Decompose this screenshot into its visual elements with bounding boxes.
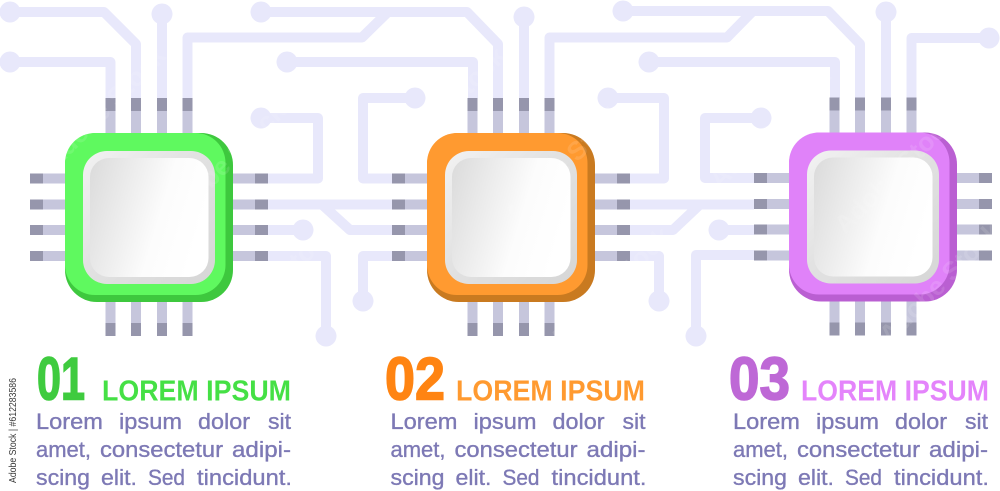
watermark: Adobe Stock [828, 105, 962, 239]
body text 02: Lorem [390, 409, 458, 434]
body text 01: tincidunt. [197, 465, 292, 490]
body text 02: consectetur [454, 437, 578, 462]
body text 03: dolor [895, 409, 947, 434]
heading 03: LOREM IPSUM [801, 376, 989, 408]
body text 01: dolor [198, 409, 250, 434]
body text 03: ipsum [816, 409, 879, 434]
body text 02: elit. [456, 465, 492, 490]
body text 03: consectetur [797, 437, 920, 462]
section 02 [385, 346, 646, 490]
body text 03: tincidunt. [894, 465, 989, 490]
body text 02: Sed [502, 465, 540, 490]
number 02: 02 [385, 346, 445, 412]
watermark: Adobe Stock [158, 95, 292, 229]
section 03 [729, 346, 989, 490]
body text 02: scing [390, 465, 444, 490]
body text 01: amet, [36, 437, 91, 462]
body text 01: consectetur [100, 437, 223, 462]
body text 02: ipsum [474, 409, 536, 434]
body text 02: sit [622, 409, 646, 434]
body text 03: sit [965, 409, 988, 434]
body text 03: elit. [798, 465, 834, 490]
body text 01: ipsum [119, 409, 182, 434]
body text 01 [36, 409, 292, 490]
chip 3: purple [754, 98, 992, 336]
watermark: Adobe Stock [498, 95, 632, 229]
watermark: Adobe Stock [378, 40, 512, 174]
body text 03: Sed [845, 465, 882, 490]
heading 01: LOREM IPSUM [102, 376, 291, 408]
watermark: Adobe Stock [543, 220, 677, 354]
watermark [38, 40, 1000, 354]
body text 02: dolor [552, 409, 604, 434]
body text 03: scing [733, 465, 787, 490]
body text 02: tincidunt. [552, 465, 646, 490]
heading 02: LOREM IPSUM [456, 376, 645, 408]
body text 02 [390, 409, 646, 490]
body text 03: Lorem [733, 409, 800, 434]
body text 03: amet, [733, 437, 788, 462]
chip 2: orange [392, 98, 630, 336]
section 01 [36, 346, 292, 490]
body text 01: scing [36, 465, 90, 490]
body text 01: sit [268, 409, 291, 434]
watermark: Adobe Stock [208, 215, 342, 349]
circuit traces background [0, 0, 1000, 346]
body text 02: amet, [390, 437, 446, 462]
stock id side label: Adobe Stock | #612283586 [7, 378, 19, 483]
body text 03 [733, 409, 989, 490]
body text 01: Lorem [36, 409, 103, 434]
body text 01: adipi- [232, 437, 291, 462]
body text 03: adipi- [929, 437, 988, 462]
body text 01: elit. [101, 465, 137, 490]
chip 1: green [30, 98, 268, 336]
number 03: 03 [729, 346, 790, 412]
watermark: Adobe Stock [38, 40, 172, 174]
number 01: 01 [37, 346, 85, 412]
body text 01: Sed [148, 465, 185, 490]
body text 02: adipi- [586, 437, 646, 462]
watermark: Adobe Stock [703, 60, 837, 194]
